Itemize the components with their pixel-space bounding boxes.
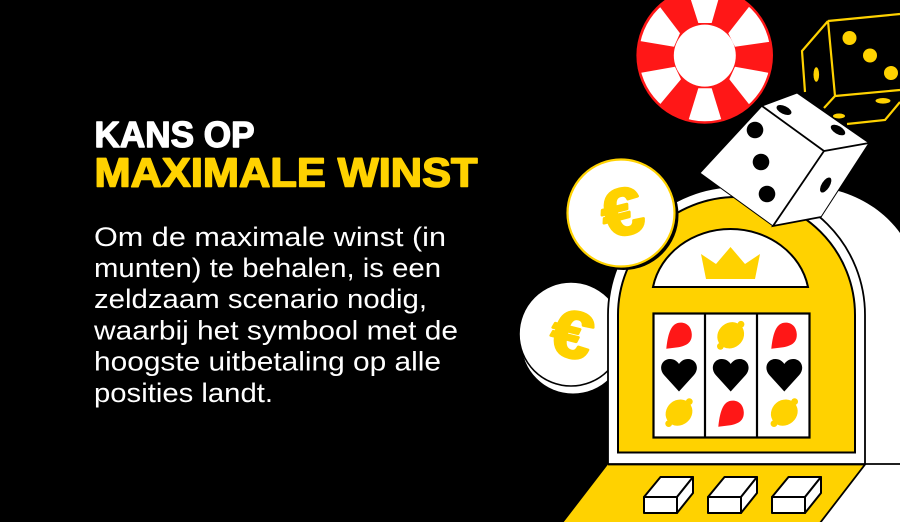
machine base right divider [865,463,900,465]
body text: zeldzaam scenario nodig, [94,284,427,314]
icon: white die [700,93,869,226]
body text: hoogste uitbetaling op alle [94,346,441,376]
coin: upper euro coin [568,160,678,270]
euro symbol: € [543,294,601,375]
reel symbols: bottom row [660,394,803,431]
body text: munten) te behalen, is een [94,253,441,283]
body text [93,222,458,408]
button 3 [772,477,821,513]
reel symbols: top row [666,317,797,354]
button 1 [644,477,693,513]
crown panel [653,229,808,287]
icon: crown [701,247,760,279]
body text: waarbij het symbool met de [93,316,458,346]
reel symbols: hearts row [661,359,802,392]
title [94,114,478,196]
machine control deck [563,464,865,522]
reels panel [654,314,810,438]
machine outer shell [608,186,865,464]
slot machine [563,186,900,522]
body text: posities landt. [94,378,273,408]
heading line: MAXIMALE WINST: MAXIMALE WINST [94,150,478,196]
heading line: KANS OP: KANS OP [94,114,254,155]
white backdrop arch [800,187,900,522]
icon: red casino chip [634,0,775,125]
body text: Om de maximale winst (in [94,222,446,252]
machine yellow body [618,197,855,452]
coin: lower euro coin [519,282,624,394]
icon: yellow outline die [802,14,900,124]
euro symbol: € [593,172,651,253]
button 2 [708,477,757,513]
